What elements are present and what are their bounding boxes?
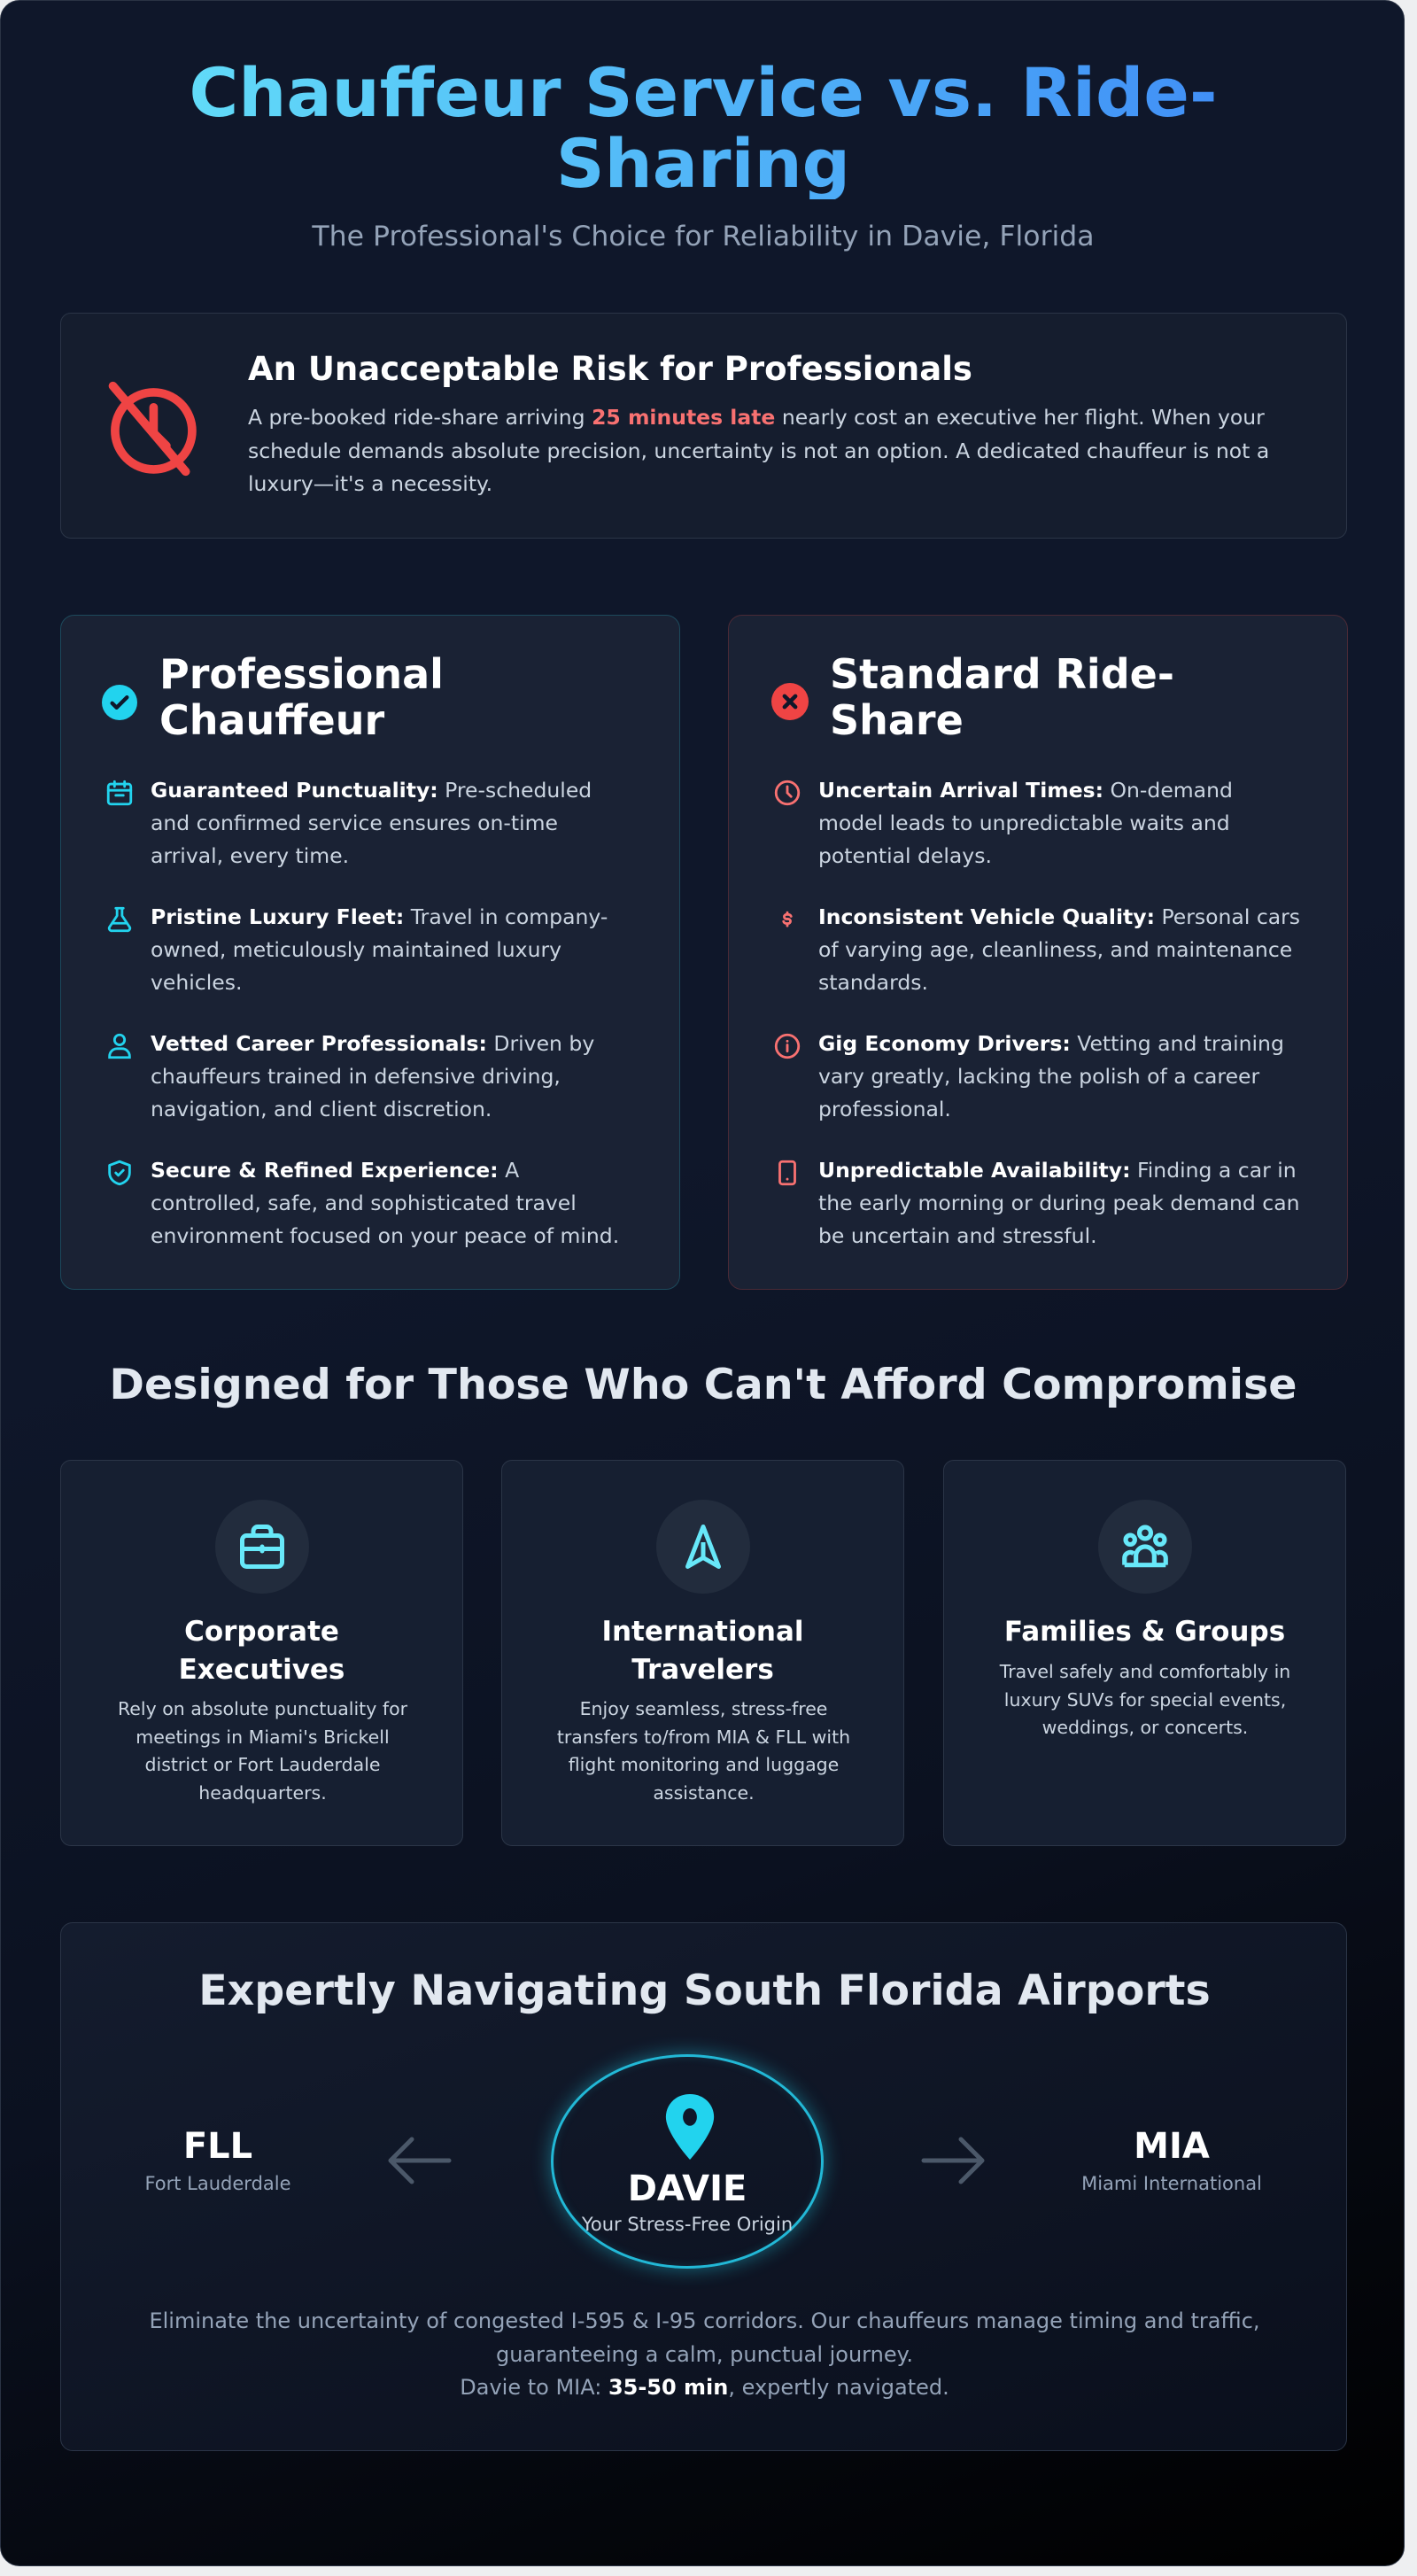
item: gig drivers: Gig Economy Drivers: Vetting and training vary greatly, lacking the polish of a career professional. (818, 1031, 1284, 1121)
text: corridor note: guaranteeing a calm, punctual journey. (496, 2342, 913, 2367)
icon: x circle (771, 683, 809, 720)
item: fleet: Pristine Luxury Fleet: Travel in company-owned, meticulously maintained luxury vehicles. (151, 904, 608, 995)
panel: standard ride-share (728, 615, 1348, 1290)
panel: unacceptable risk (60, 313, 1347, 539)
heading: professional chauffeur: Professional (159, 650, 444, 698)
heading: professional chauffeur (159, 650, 444, 744)
label: MIA: Miami International (1081, 2173, 1262, 2194)
item: vehicle quality: Inconsistent Vehicle Quality: Personal cars of varying age, cleanliness, and maintenance standards. (818, 904, 1300, 995)
item: arrival: Uncertain Arrival Times: On-demand model leads to unpredictable waits and potential delays. (818, 778, 1233, 868)
title: international (601, 1616, 804, 1686)
card: corporate executives (60, 1460, 463, 1846)
text: families: Travel safely and comfortably in luxury SUVs for special events, weddings, or concerts. (1000, 1661, 1290, 1738)
label: FLL (144, 2126, 291, 2194)
icon: navigation (656, 1500, 750, 1594)
text: risk story: A pre-booked ride-share arriving 25 minutes late nearly cost an executive her flight. When your schedule demands absolute precision, uncertainty is not an option. A dedicated chauffeur is not a luxury—it's a necessity. (248, 405, 1269, 496)
heading: risk: An Unacceptable Risk for Professionals (248, 350, 972, 388)
item: secure: Secure & Refined Experience: A controlled, safe, and sophisticated travel environment focused on your peace of mind. (151, 1158, 619, 1248)
icon: group (1098, 1500, 1192, 1594)
title: Chauffeur Service vs. Ride- (189, 53, 1217, 132)
icon: map pin (666, 2094, 714, 2160)
label: FLL: FLL (183, 2126, 252, 2167)
item: punctuality: Guaranteed Punctuality: Pre-scheduled and confirmed service ensures on-time arrival, every time. (151, 778, 592, 868)
origin: Davie: DAVIE (628, 2169, 747, 2209)
title: international: International (601, 1616, 804, 1648)
heading: airports: Expertly Navigating South Florida Airports (198, 1967, 1211, 2015)
subtitle: The Professional's Choice for Reliability in Davie, Florida (312, 221, 1095, 252)
card: families (943, 1460, 1346, 1846)
heading: standard ride-share: Standard Ride- (830, 650, 1174, 698)
arrow: right (921, 2137, 985, 2184)
title: corporate: Executives (179, 1654, 345, 1686)
title (1, 58, 1405, 199)
label: FLL: Fort Lauderdale (144, 2173, 291, 2194)
heading: professional chauffeur: Chauffeur (159, 696, 384, 744)
heading: standard ride-share (830, 650, 1174, 744)
text: international: Enjoy seamless, stress-free transfers to/from MIA & FLL with flight monitoring and luggage assistance. (557, 1698, 850, 1804)
title: Sharing (556, 124, 850, 203)
text: corporate: Rely on absolute punctuality for meetings in Miami's Brickell district or Fort Lauderdale headquarters. (118, 1698, 407, 1804)
card: international travelers (501, 1460, 904, 1846)
title: families: Families & Groups (1004, 1616, 1285, 1648)
item: professionals: Vetted Career Professionals: Driven by chauffeurs trained in defensive driving, navigation, and client discretion. (151, 1031, 594, 1121)
label: MIA: MIA (1134, 2126, 1210, 2167)
panel: airports (60, 1922, 1347, 2451)
item: availability: Unpredictable Availability: Finding a car in the early morning or during peak demand can be uncertain and stressful. (818, 1158, 1300, 1248)
panel: professional chauffeur (60, 615, 680, 1290)
icon: briefcase (215, 1500, 309, 1594)
title: corporate (179, 1616, 345, 1686)
icon: clock with slash (108, 381, 197, 477)
heading: designed for: Designed for Those Who Can't Afford Compromise (110, 1361, 1297, 1409)
title: corporate: Corporate (184, 1616, 339, 1648)
title: international: Travelers (631, 1654, 774, 1686)
arrow: left (388, 2137, 452, 2184)
text: corridor note: Eliminate the uncertainty of congested I-595 & I-95 corridors. Our chauffeurs manage timing and traffic, (149, 2308, 1260, 2333)
icon: check circle (102, 685, 137, 720)
origin: Davie: Your Stress-Free Origin (582, 2214, 793, 2235)
text: corridor note (149, 2308, 1260, 2400)
origin: Davie (551, 2054, 824, 2269)
text: corridor note: Davie to MIA: 35-50 min, expertly navigated. (460, 2375, 949, 2400)
label: MIA (1081, 2126, 1262, 2194)
heading: standard ride-share: Share (830, 696, 964, 744)
